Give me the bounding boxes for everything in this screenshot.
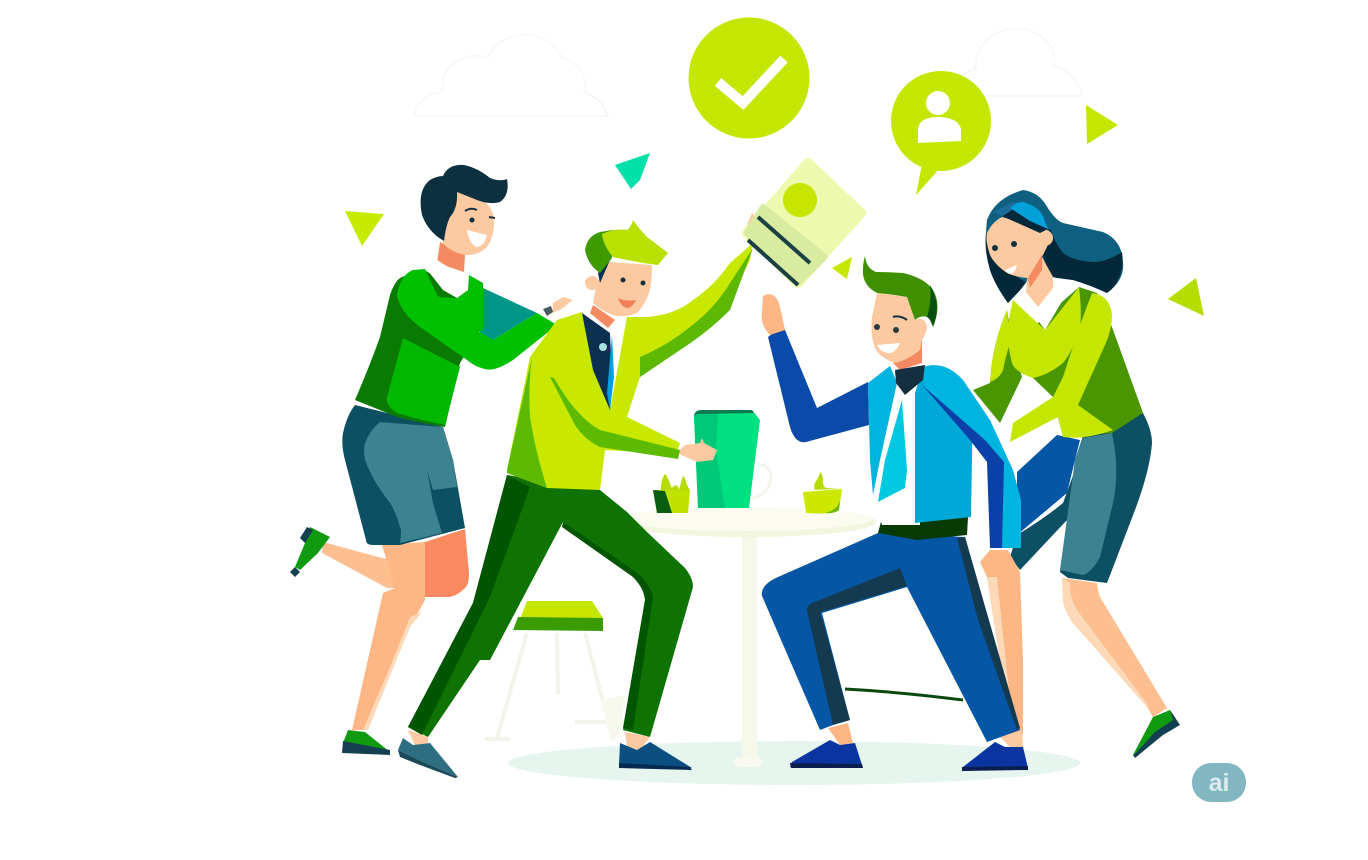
icon: user speech bubble	[891, 71, 991, 195]
woman collar	[1018, 277, 1073, 330]
man left neck	[437, 242, 465, 272]
person: woman behind	[973, 190, 1180, 758]
man left shorts	[342, 405, 465, 545]
stool bar	[845, 689, 963, 700]
man left hand	[543, 297, 573, 316]
man centre jacket	[507, 243, 753, 490]
woman headband	[993, 201, 1048, 233]
man right shirt	[875, 380, 920, 525]
man left head	[421, 165, 508, 255]
man right trousers	[762, 533, 1020, 742]
triangle far right	[1168, 278, 1204, 316]
man left back arm	[480, 288, 537, 340]
badge: ai	[1192, 763, 1246, 802]
man left kicked leg	[322, 542, 395, 588]
woman hair	[986, 190, 1123, 303]
man left sweater	[355, 269, 557, 427]
woman knee leg and hand	[980, 550, 1023, 735]
man left collar	[425, 260, 469, 298]
man right hand	[762, 294, 785, 335]
man right feet	[790, 723, 1028, 771]
card held up	[747, 163, 861, 285]
man centre right foot	[619, 732, 692, 770]
woman face	[986, 217, 1053, 288]
man centre hand on card	[744, 213, 760, 248]
man centre trousers	[408, 475, 693, 737]
person: man centre in lime jacket	[398, 213, 760, 778]
person: man right in blue	[762, 256, 1028, 771]
icon: check mark badge	[688, 18, 810, 138]
man right neck	[893, 340, 922, 370]
bowl right	[803, 472, 842, 514]
cloud outline right	[950, 28, 1082, 96]
triangle right top	[1086, 105, 1118, 144]
bowl left	[653, 474, 690, 513]
floor shadow	[508, 741, 1080, 785]
cloud outline left	[414, 35, 608, 116]
triangle left	[345, 211, 384, 246]
chair	[485, 601, 625, 740]
man left thigh	[425, 529, 469, 597]
table	[620, 507, 876, 767]
woman leg highlight	[987, 577, 1010, 700]
cup with handle	[694, 410, 771, 508]
triangle teal	[615, 153, 650, 189]
person: man left in green sweater	[290, 165, 573, 755]
woman neck	[1026, 257, 1053, 307]
triangle small near card	[832, 257, 852, 279]
woman skirt	[1010, 413, 1152, 583]
man centre head	[585, 220, 668, 316]
woman shoe	[1133, 710, 1180, 758]
woman sweater	[973, 287, 1143, 442]
badge: ai: ai	[1209, 769, 1229, 797]
man centre hand on cup	[677, 438, 717, 462]
man right jacket	[868, 365, 1021, 548]
man left kicked shoe	[290, 527, 330, 577]
man right collar	[895, 365, 925, 395]
man centre shirt	[582, 313, 625, 410]
man right head	[863, 256, 938, 363]
man centre left foot	[398, 730, 458, 778]
man centre neck	[590, 305, 615, 328]
woman back leg	[1062, 578, 1167, 717]
man left shoe	[342, 730, 390, 755]
man right raised arm	[768, 330, 869, 442]
man right belt	[878, 517, 968, 540]
man left standing leg	[352, 542, 425, 730]
